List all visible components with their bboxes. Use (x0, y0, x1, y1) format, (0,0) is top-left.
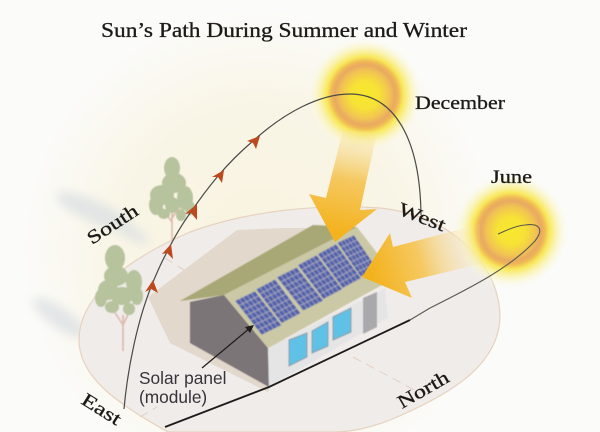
sun glow: June (453, 173, 569, 289)
sun path: June continuation (410, 225, 540, 320)
ground ellipse (79, 207, 500, 432)
solar array (235, 235, 377, 335)
arrow: June sun to panel (362, 224, 480, 298)
sun path: June, ground line (165, 320, 410, 427)
tree: front (95, 245, 143, 351)
window 2 (312, 322, 328, 353)
front wall (268, 288, 388, 387)
sun path: December (124, 94, 421, 409)
label: December: December (415, 93, 506, 114)
house shadow (148, 228, 316, 392)
label: North: North (394, 367, 454, 413)
door (363, 292, 377, 334)
label: June: June (491, 167, 532, 188)
label: solar panel: (module) (139, 387, 207, 407)
window 1 (289, 333, 307, 366)
label: solar panel: Solar panel (139, 368, 226, 388)
title: Sun’s Path During Summer and Winter (101, 18, 467, 42)
roof front slope (224, 227, 384, 348)
tree shadows (28, 185, 152, 345)
sun glow: December (307, 37, 423, 153)
label: South: South (83, 200, 143, 249)
label: West: West (395, 199, 449, 237)
path arrowheads (145, 136, 260, 293)
roof back slope (180, 225, 357, 301)
solar panel pointer (202, 325, 254, 368)
window 3 (333, 308, 351, 340)
tree: rear (149, 157, 195, 240)
arrow: December sun to panel (309, 130, 377, 242)
gable wall (190, 295, 269, 387)
compass dashed lines (140, 258, 420, 417)
house (180, 225, 388, 387)
label: East: East (77, 389, 126, 431)
